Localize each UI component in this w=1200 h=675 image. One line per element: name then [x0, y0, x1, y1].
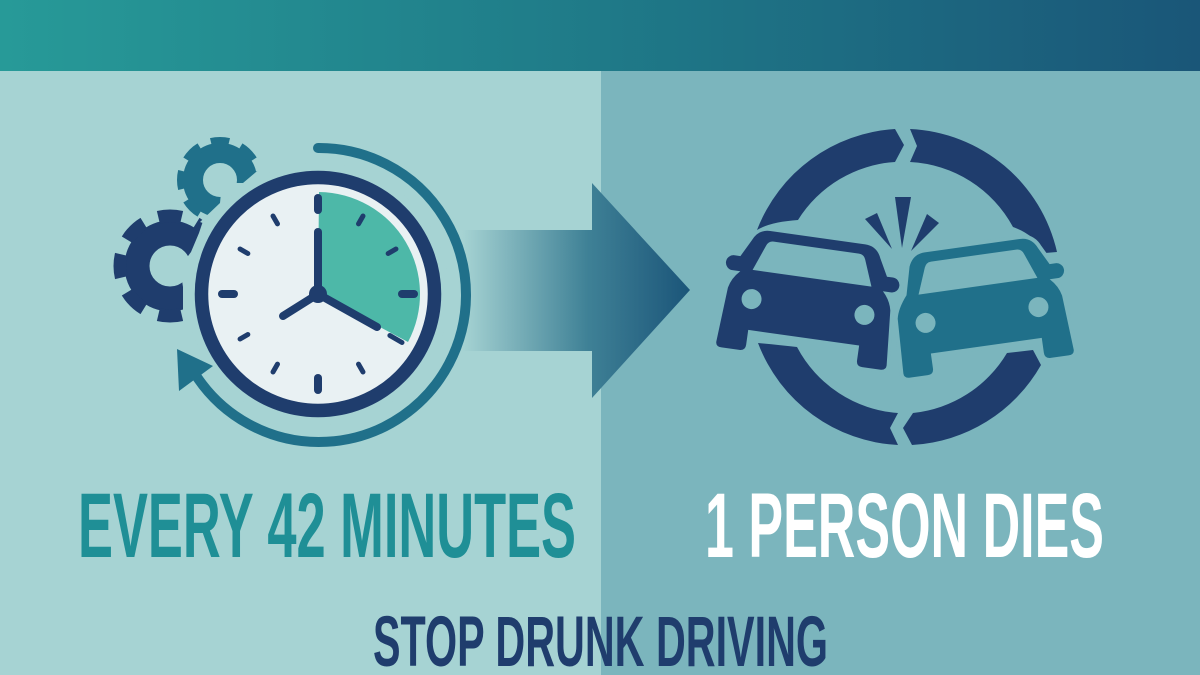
- car halo: [887, 234, 1076, 378]
- left headlight: [740, 288, 763, 310]
- clock halo separating gears: [187, 163, 449, 425]
- text: every 42 minutes: EVERY 42 MINUTES: [78, 475, 576, 577]
- icon: clock: [202, 178, 434, 410]
- icon: teal car: [887, 234, 1076, 378]
- clock rim: [202, 178, 434, 410]
- icon: navy car: [714, 226, 904, 371]
- icon: broken ring: [757, 129, 1057, 445]
- windshield: [753, 239, 876, 287]
- top header bar: [0, 0, 1200, 71]
- left headlight: [914, 312, 937, 334]
- icon: gears: [120, 142, 300, 330]
- icon: navy gear: [120, 216, 220, 316]
- panel: left background: [0, 71, 601, 675]
- icon: impact sparks: [865, 197, 939, 251]
- minor hour ticks: [240, 216, 402, 372]
- major hour ticks: [222, 198, 414, 390]
- icon: circular arrow around clock: [177, 148, 466, 442]
- panel: right background: [601, 71, 1200, 675]
- windshield: [914, 247, 1037, 295]
- icon: teal gear: [182, 142, 258, 218]
- clock dial: [208, 184, 428, 404]
- circular arc: [197, 148, 466, 442]
- car halo: [714, 226, 904, 371]
- navy gear opening: [180, 215, 235, 330]
- highlighted time sector: [318, 192, 420, 342]
- arrowhead: [177, 349, 213, 391]
- right headlight: [853, 304, 876, 326]
- clock hands: [283, 232, 377, 327]
- car body: [887, 234, 1076, 378]
- teal gear opening: [200, 160, 300, 240]
- arrow: from clock to crash: [462, 183, 690, 398]
- car body: [714, 226, 904, 371]
- right headlight: [1027, 296, 1050, 318]
